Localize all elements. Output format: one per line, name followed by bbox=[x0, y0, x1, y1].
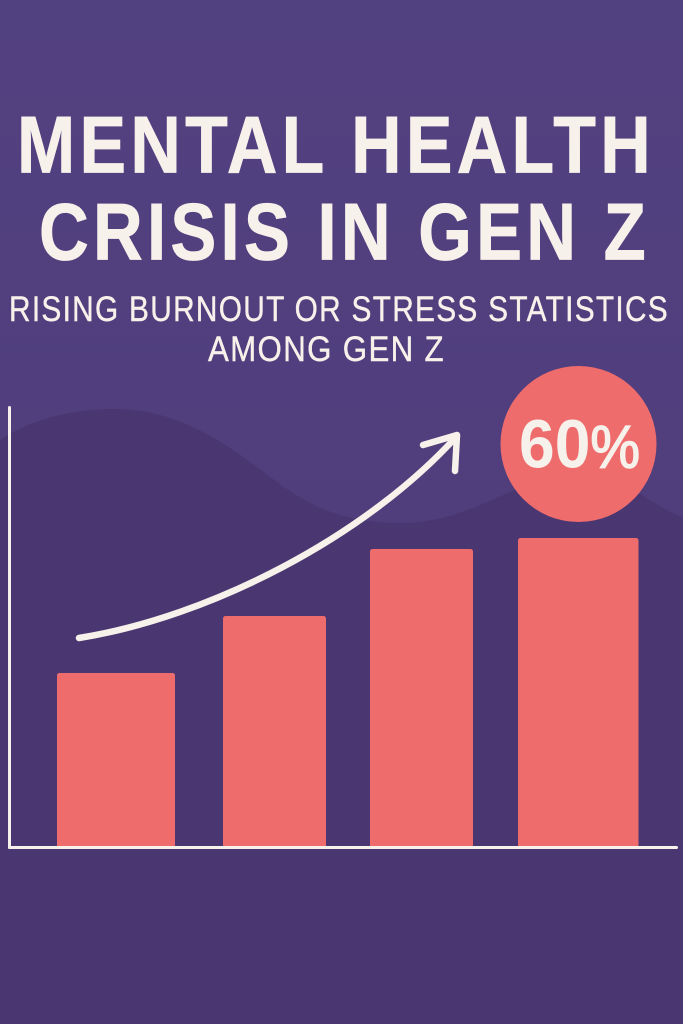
60% label: 60% bbox=[519, 406, 640, 482]
rising trend arrow bbox=[79, 435, 457, 638]
bar 2 bbox=[223, 616, 326, 848]
y axis bbox=[8, 406, 11, 849]
title bbox=[17, 100, 655, 278]
background wave bbox=[0, 409, 683, 1024]
bar chart bbox=[8, 406, 678, 849]
subtitle: AMONG GEN Z bbox=[208, 330, 445, 369]
bar 1 bbox=[57, 673, 175, 848]
bar 4 bbox=[518, 538, 638, 848]
60% callout circle bbox=[500, 366, 656, 522]
subtitle bbox=[9, 290, 669, 369]
x axis bbox=[8, 846, 678, 849]
bar 3 bbox=[370, 549, 473, 848]
